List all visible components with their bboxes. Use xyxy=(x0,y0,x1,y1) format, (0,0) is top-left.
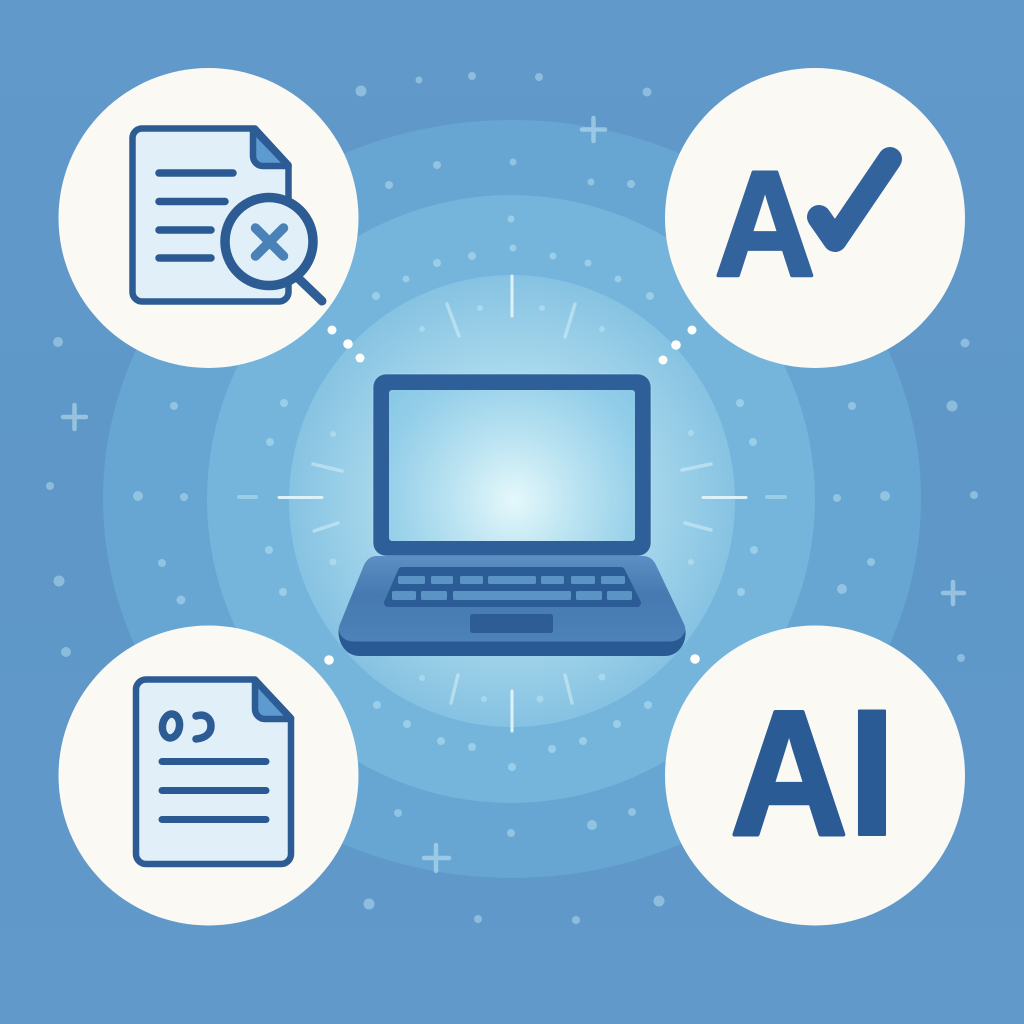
document lines xyxy=(162,762,266,820)
radial tick marks xyxy=(239,276,785,731)
base xyxy=(339,556,685,644)
plus sparkles xyxy=(63,118,964,871)
quote marks xyxy=(161,713,211,739)
screen xyxy=(389,390,635,541)
trackpad xyxy=(470,614,553,633)
icon circle: document with magnifier and x xyxy=(58,68,358,368)
keyboard xyxy=(388,571,637,603)
check mark xyxy=(819,159,890,240)
icon circle: document with quote marks xyxy=(58,626,358,926)
document xyxy=(132,128,288,302)
magnifier xyxy=(225,198,322,301)
icon circle: AI text: A xyxy=(730,675,848,873)
icon circle: AI text xyxy=(665,626,965,926)
icon circle: AI text: I xyxy=(847,672,897,874)
screen bezel xyxy=(373,374,651,556)
icon circle: letter A with check mark xyxy=(665,68,965,368)
connector dots xyxy=(324,326,700,665)
icon circle: letter A with check mark: A xyxy=(715,140,815,308)
sparkle dots xyxy=(46,72,978,924)
front edge xyxy=(338,630,686,656)
document lines xyxy=(159,173,233,258)
folded corner xyxy=(253,129,288,166)
concentric glow rings xyxy=(103,120,921,878)
laptop xyxy=(338,374,686,656)
